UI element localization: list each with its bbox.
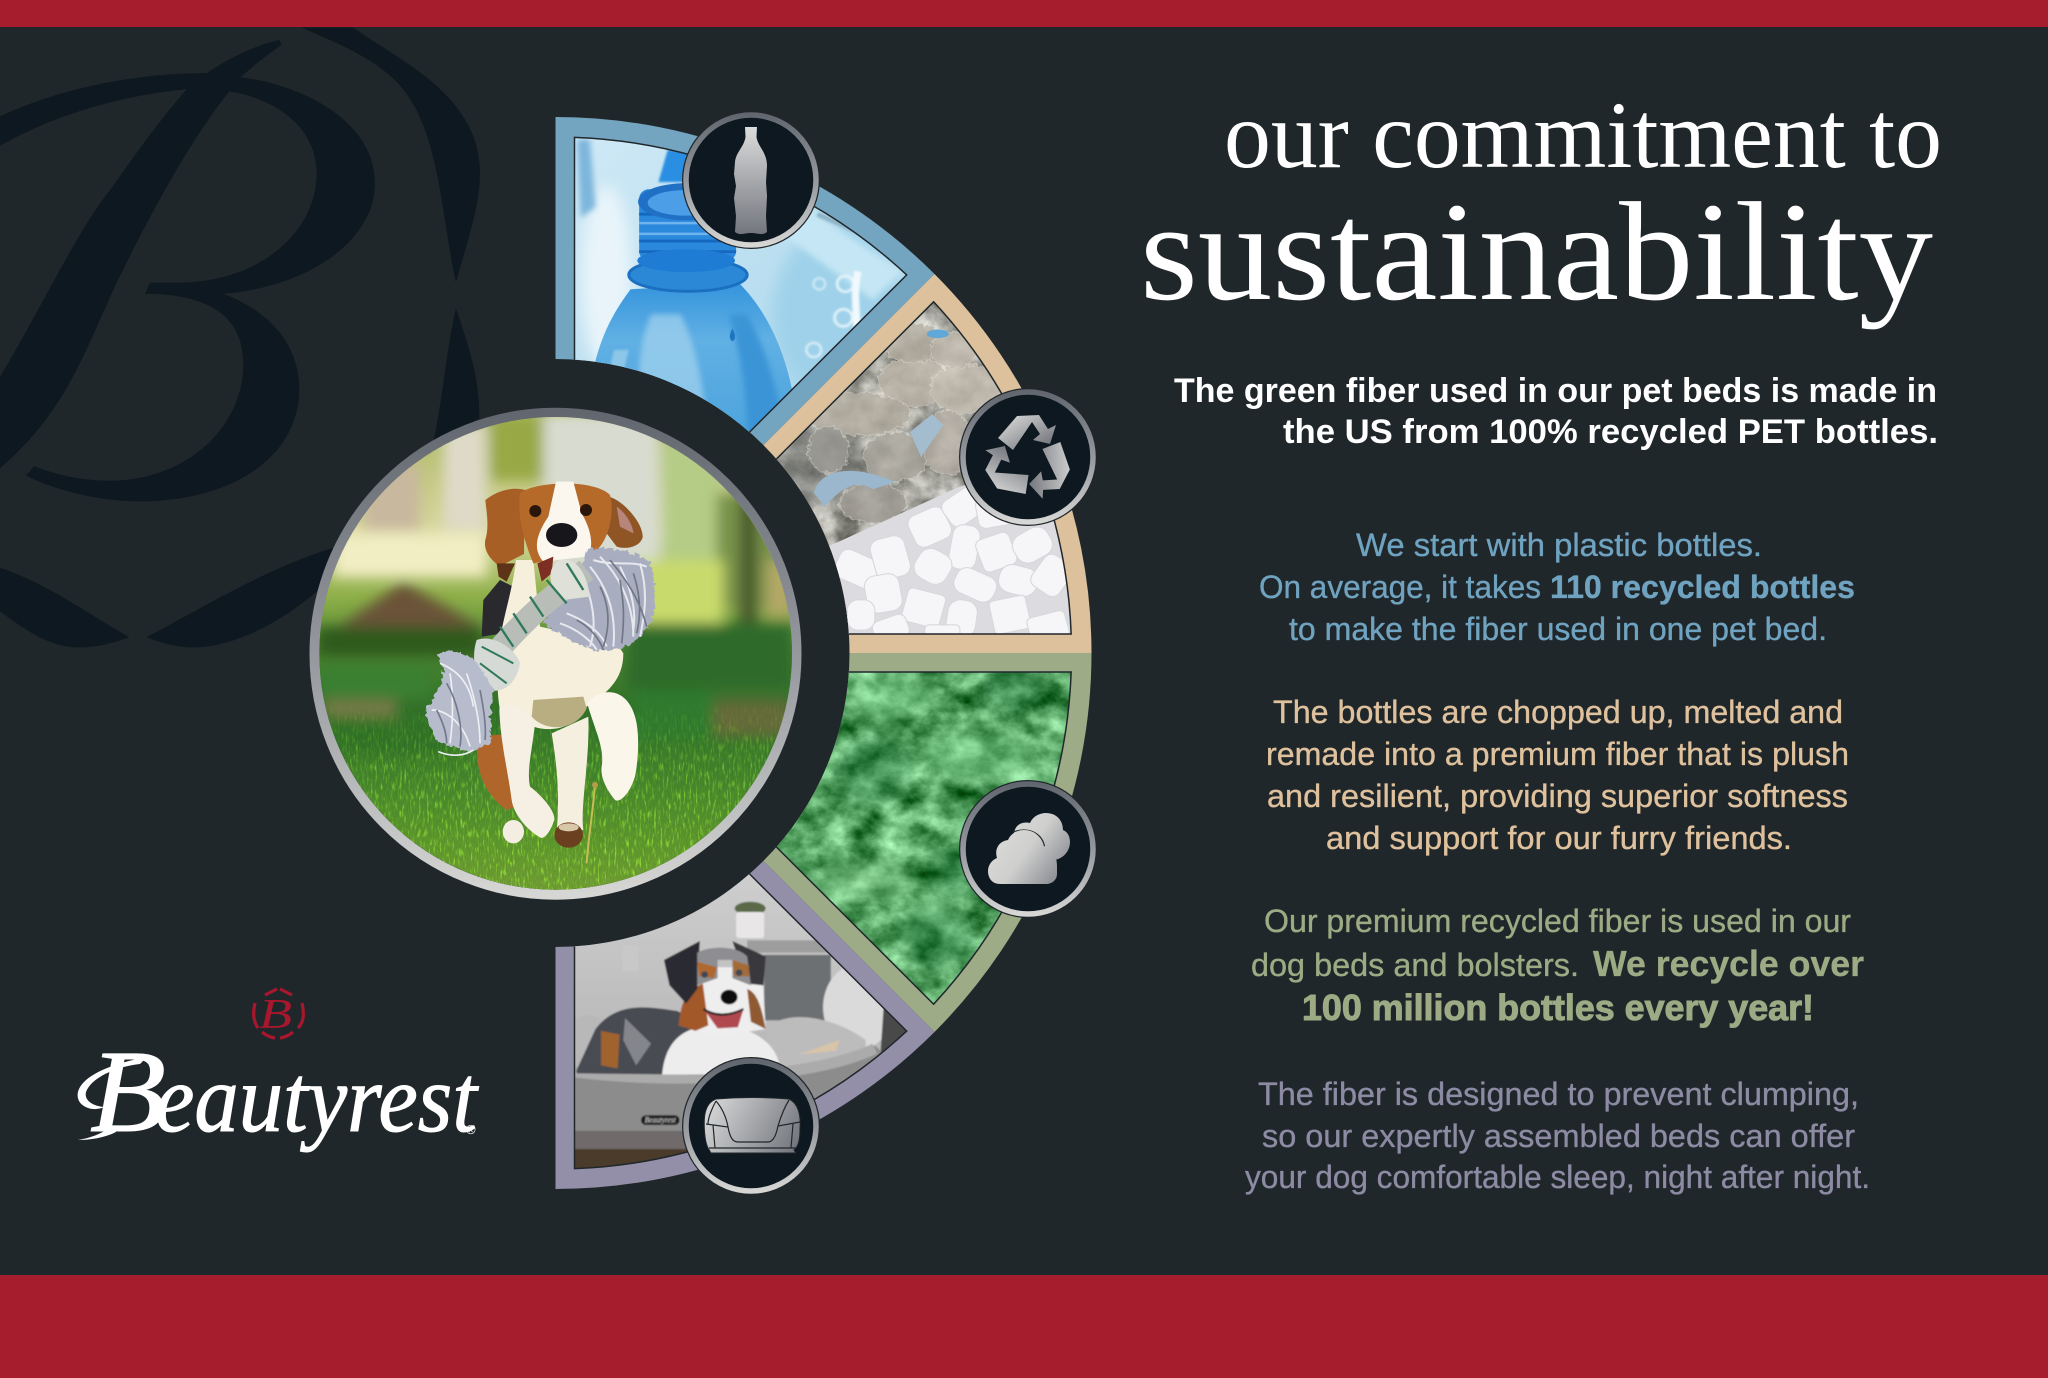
- logo emblem: [254, 989, 303, 1038]
- band: blue sector: [556, 117, 934, 445]
- photo: plastic flakes and white pellets: [776, 303, 1070, 634]
- subheading: the US from 100% recycled PET bottles.: [1283, 413, 1938, 451]
- rope toy: [426, 548, 655, 755]
- band: tan sector: [763, 274, 1092, 653]
- text block: purple: The fiber is designed to prevent clumping,: [1258, 1076, 1859, 1112]
- text block: blue: to make the fiber used in one pet bed.: [1289, 611, 1827, 647]
- icon: recycle: [959, 388, 1097, 526]
- text block: blue: 110 recycled bottles: [1550, 569, 1855, 605]
- photo: dog on gray pet bed: [574, 874, 906, 1168]
- text block: tan: The bottles are chopped up, melted and: [1273, 694, 1843, 730]
- text block: blue: We start with plastic bottles.: [1356, 527, 1762, 563]
- logo emblem: B: [259, 992, 292, 1038]
- icon: bottle: [682, 111, 820, 249]
- photo: plastic bottle: [570, 132, 917, 443]
- text block: green: We recycle over: [1593, 943, 1864, 984]
- logo: Beautyrest: [78, 989, 479, 1157]
- text block: purple: your dog comfortable sleep, night after night.: [1245, 1159, 1870, 1195]
- text block: purple: [1245, 1076, 1870, 1195]
- band: green sector: [763, 653, 1092, 1032]
- text block: tan: and support for our furry friends.: [1326, 820, 1792, 856]
- text block: green: 100 million bottles every year!: [1302, 987, 1814, 1028]
- wedge outlines: [574, 137, 1071, 1169]
- watermark: large script B emblem: [0, 27, 480, 647]
- title: sustainability: [1140, 174, 1933, 330]
- text block: green: dog beds and bolsters.: [1251, 947, 1579, 983]
- logo swash: [78, 1056, 148, 1140]
- icon: clouds: [959, 780, 1097, 918]
- text block: green: [1251, 903, 1864, 1028]
- panel: process fan: [556, 111, 1097, 1195]
- subheading: The green fiber used in our pet beds is made in: [1174, 372, 1937, 410]
- logo wordmark: B: [90, 1026, 166, 1157]
- dog body: [477, 560, 638, 848]
- bottom red bar: [0, 1275, 2048, 1378]
- text block: blue: On average, it takes: [1259, 569, 1541, 605]
- tag on bed: Beautyrest: [645, 1116, 676, 1124]
- text block: tan: and resilient, providing superior softness: [1267, 778, 1848, 814]
- photo: beagle running with rope toy: [313, 413, 800, 895]
- subheading: [1174, 372, 1938, 451]
- dog head: [485, 482, 643, 582]
- title: our commitment to: [1224, 82, 1942, 188]
- logo wordmark: eautyrest: [155, 1045, 479, 1152]
- text block: purple: so our expertly assembled beds can offer: [1262, 1118, 1855, 1154]
- registered mark: ®: [466, 1122, 476, 1137]
- text block: tan: [1266, 694, 1849, 856]
- icon: pet bed: [682, 1057, 820, 1195]
- text block: tan: remade into a premium fiber that is plush: [1266, 736, 1849, 772]
- title: [1140, 82, 1942, 330]
- text block: blue: [1259, 527, 1855, 647]
- text block: green: Our premium recycled fiber is used in our: [1264, 903, 1851, 939]
- top red bar: [0, 0, 2048, 27]
- photo: green recycled fiber: [776, 672, 1070, 1003]
- band: purple sector: [556, 861, 934, 1189]
